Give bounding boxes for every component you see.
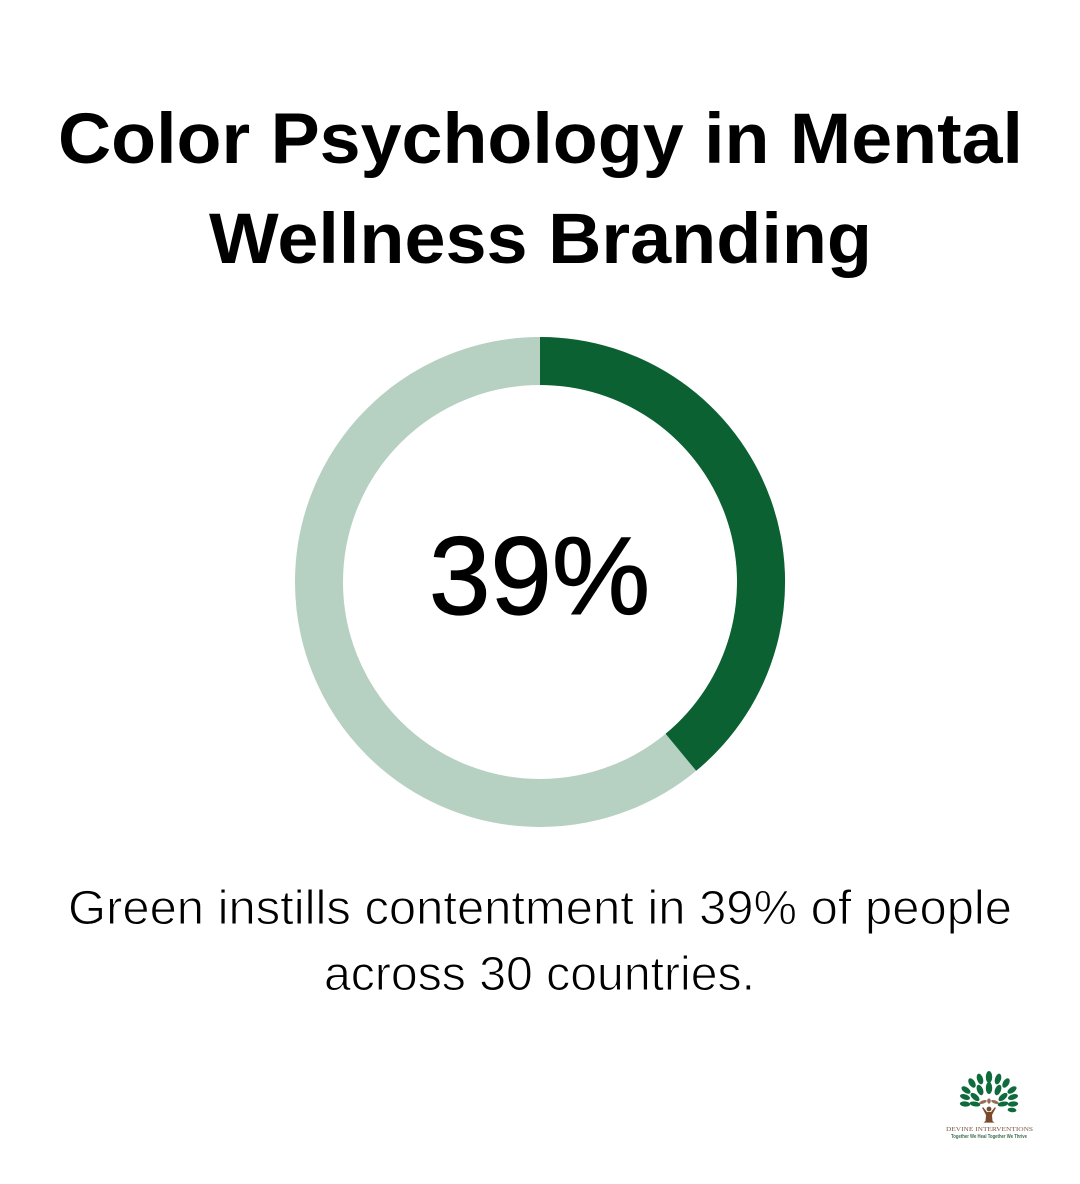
- center value: 39%: [429, 515, 650, 638]
- description: [68, 882, 1012, 1001]
- title: Color Psychology in Mental: [58, 100, 1023, 179]
- logo tagline: Together We Heal Together We Thrive: [951, 1134, 1027, 1140]
- title: [58, 100, 1023, 279]
- logo: Devine Interventions: [946, 1071, 1033, 1140]
- icon: tree: [959, 1071, 1019, 1113]
- donut value segment: [540, 337, 785, 771]
- logo name: DEVINE INTERVENTIONS: [946, 1126, 1033, 1133]
- donut track: [319, 361, 761, 803]
- icon: trunk figure: [979, 1098, 999, 1123]
- description: Green instills contentment in 39% of people: [68, 882, 1012, 935]
- description: across 30 countries.: [324, 948, 755, 1001]
- donut chart: 39%: [319, 337, 785, 803]
- title: Wellness Branding: [209, 200, 872, 279]
